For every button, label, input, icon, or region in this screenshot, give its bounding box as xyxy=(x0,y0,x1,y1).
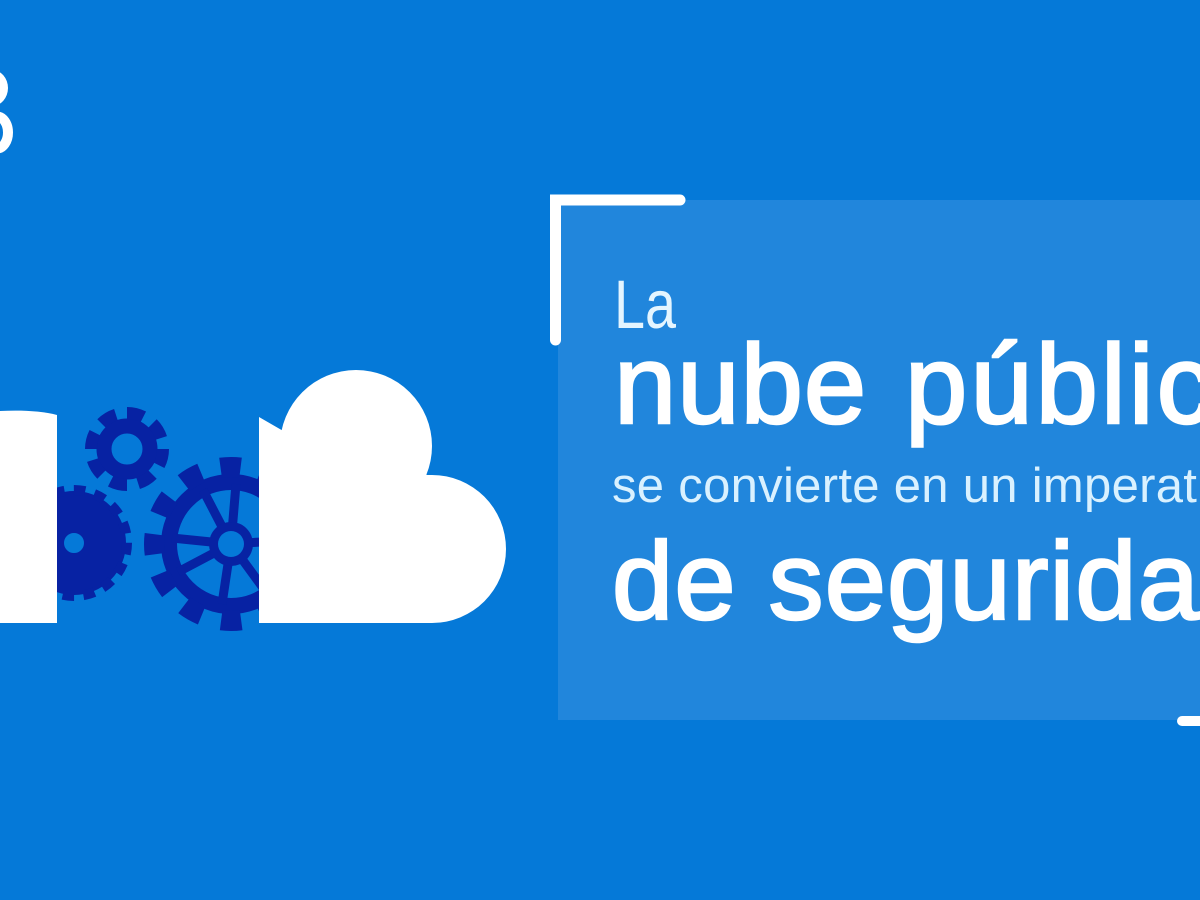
cloud: right half xyxy=(259,370,506,623)
bracket: top left xyxy=(556,200,680,340)
gears xyxy=(57,407,259,631)
cloud: left half xyxy=(0,411,57,623)
title xyxy=(612,266,1200,643)
bracket: bottom right xyxy=(1182,716,1200,726)
title line: La: La xyxy=(614,266,677,343)
title line: nube pública: nube xyxy=(614,322,867,447)
icon: solid gear xyxy=(57,485,132,601)
icon: large spoked gear xyxy=(144,457,259,631)
icon: small gear xyxy=(91,413,163,485)
illustration: cloud with gears xyxy=(0,370,506,623)
panel: title background xyxy=(558,200,1200,720)
logo fragment xyxy=(0,70,8,148)
